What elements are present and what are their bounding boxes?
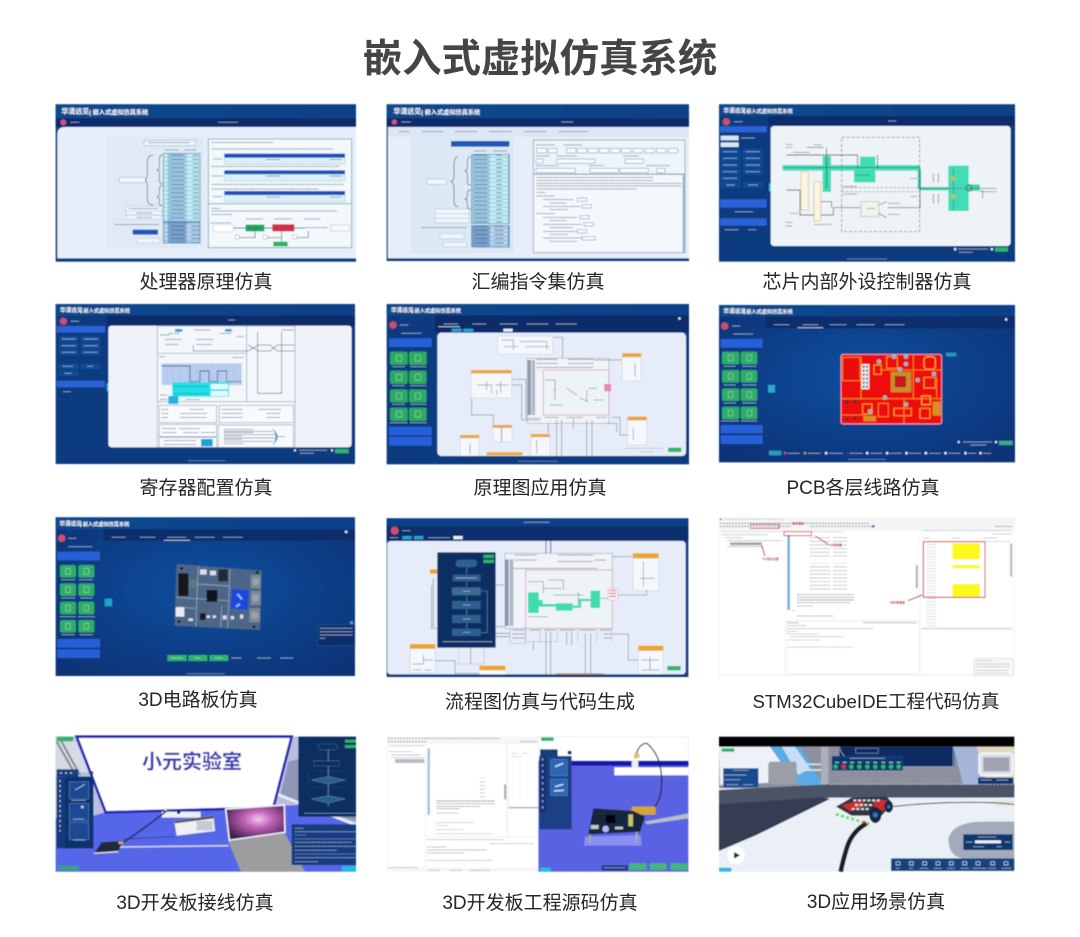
caption: 3D开发板工程源码仿真 xyxy=(442,892,638,914)
caption: 寄存器配置仿真 xyxy=(139,477,273,499)
screenshot: STM32CubeIDE: PC指针位置 xyxy=(763,556,779,561)
panel: 流程图仿真与代码生成 xyxy=(387,518,688,713)
panel: STM32CubeIDE工程代码仿真 xyxy=(718,517,1015,712)
screenshot: processor principle xyxy=(56,104,356,262)
screenshot: schematic application xyxy=(387,304,689,464)
panel: 芯片内部外设控制器仿真 xyxy=(719,104,1015,293)
screenshot: chip peripheral controller: 华清远见 xyxy=(723,106,746,114)
screenshot: schematic application: | 嵌入式虚拟仿真系统 xyxy=(412,307,462,315)
screenshot: 3D board project source xyxy=(387,737,688,872)
caption: 汇编指令集仿真 xyxy=(471,271,605,293)
screenshot: chip peripheral controller xyxy=(719,104,1015,262)
screenshot: 3D circuit board: | 嵌入式虚拟仿真系统 xyxy=(80,520,130,528)
caption: 处理器原理仿真 xyxy=(139,271,273,293)
caption: 芯片内部外设控制器仿真 xyxy=(762,271,972,293)
screenshot: register configuration xyxy=(56,304,355,464)
caption: 原理图应用仿真 xyxy=(473,477,607,499)
screenshot: STM32CubeIDE: 单步调试 xyxy=(792,520,804,525)
screenshot: schematic application: 华清远见 xyxy=(391,306,414,314)
caption: 流程图仿真与代码生成 xyxy=(445,691,635,713)
screenshot: PCB layers: | 嵌入式虚拟仿真系统 xyxy=(743,308,793,316)
panel: 原理图应用仿真 xyxy=(387,304,689,499)
panel: 3D电路板仿真 xyxy=(56,517,355,711)
screenshot: assembly instruction set: | 嵌入式虚拟仿真系统 xyxy=(421,109,480,117)
caption: 3D开发板接线仿真 xyxy=(116,892,274,914)
panel: 寄存器配置仿真 xyxy=(56,304,355,499)
screenshot: 3D circuit board: 华清远见 xyxy=(59,520,82,528)
screenshot: chip peripheral controller: | 嵌入式虚拟仿真系统 xyxy=(743,107,793,115)
panel: 处理器原理仿真 xyxy=(56,104,356,293)
screenshot: flow chart and code generation xyxy=(387,518,688,677)
screenshot: assembly instruction set: 华清远见 xyxy=(393,107,421,116)
screenshot: PCB layers xyxy=(719,305,1015,462)
screenshot: 3D board wiring lab xyxy=(56,737,356,872)
caption: 3D应用场景仿真 xyxy=(807,891,945,913)
screenshot: processor principle: 华清远见 xyxy=(61,107,89,116)
screenshot: 3D application scene xyxy=(719,737,1014,872)
screenshot: 3D circuit board xyxy=(56,517,355,676)
screenshot: register configuration: 华清远见 xyxy=(60,306,83,314)
screenshot: 3D board wiring lab: 小元实验室 xyxy=(142,749,242,773)
panel: 3D开发板接线仿真 xyxy=(56,737,356,914)
screenshot: processor principle: | 嵌入式虚拟仿真系统 xyxy=(89,108,148,116)
panel: 3D应用场景仿真 xyxy=(719,737,1014,913)
screenshot: STM32CubeIDE: 代码位置 xyxy=(830,542,842,547)
caption: 3D电路板仿真 xyxy=(138,689,258,711)
caption: PCB各层线路仿真 xyxy=(786,477,940,499)
screenshot: register configuration: | 嵌入式虚拟仿真系统 xyxy=(81,307,131,315)
panel: 汇编指令集仿真 xyxy=(387,104,689,293)
panel: 3D开发板工程源码仿真 xyxy=(387,737,688,914)
panel: PCB各层线路仿真 xyxy=(719,305,1015,499)
screenshot: PCB layers: 华清远见 xyxy=(723,307,746,315)
screenshot: STM32CubeIDE: 内存查看器 xyxy=(890,600,905,605)
title: 嵌入式虚拟仿真系统 xyxy=(363,37,717,81)
caption: STM32CubeIDE工程代码仿真 xyxy=(753,691,999,712)
screenshot: assembly instruction set xyxy=(387,104,689,261)
screenshot: STM32CubeIDE xyxy=(718,517,1015,676)
